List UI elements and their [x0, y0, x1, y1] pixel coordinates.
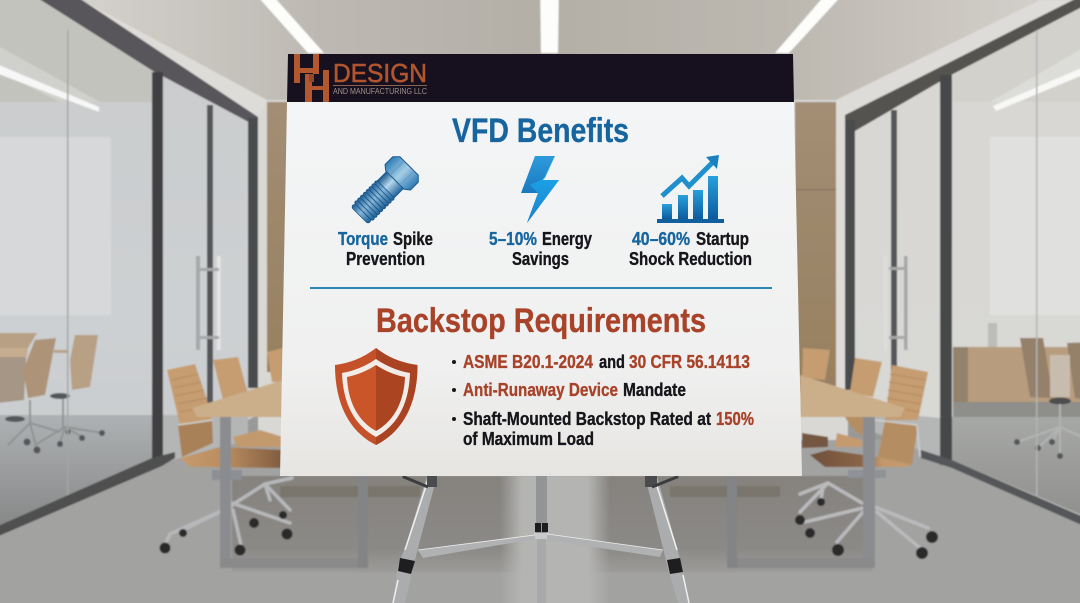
reflected ceiling [0, 0, 153, 102]
icon: lightning [521, 156, 559, 223]
frame: top beam [25, 0, 258, 127]
table top [192, 380, 283, 417]
bullet 3 [452, 409, 754, 449]
bullet 2: Anti-Runaway Device [463, 380, 618, 400]
reflected chairs [1014, 338, 1080, 459]
braces [418, 535, 535, 558]
label: Torque Spike Prevention: Torque [338, 229, 388, 249]
logo mark: HH monogram [294, 54, 329, 102]
reflected sideboard [953, 347, 1080, 403]
left leg [393, 476, 437, 603]
ceiling [0, 0, 1080, 110]
left table and chairs [160, 348, 368, 568]
heading: Backstop Requirements: Backstop Requirements [376, 302, 706, 340]
label: 5-10% Energy Savings [489, 229, 592, 269]
logo text: DESIGN [333, 58, 427, 88]
bullet 1: 30 CFR 56.14113 [629, 352, 750, 372]
label: 5-10% Energy Savings: 5–10% [489, 229, 537, 249]
chair ribs [172, 374, 210, 412]
left glass wall [0, 0, 267, 544]
table frame [863, 416, 875, 568]
hooks [404, 470, 428, 487]
heading: VFD Benefits: VFD Benefits [452, 112, 629, 150]
right glass wall [836, 0, 1080, 533]
wood wall panels [267, 102, 836, 392]
icon: bolt [347, 153, 422, 228]
bullet 3: Shaft-Mounted Backstop Rated at [463, 409, 711, 429]
right leg [645, 476, 688, 603]
frame: posts [940, 75, 952, 465]
front chair [885, 365, 928, 420]
rear chairs [802, 348, 830, 380]
board body [280, 102, 802, 476]
label: Torque Spike Prevention: Spike [393, 229, 433, 249]
reflected whiteboard [0, 137, 111, 315]
chair bases [800, 483, 928, 548]
label: Torque Spike Prevention [338, 229, 433, 269]
table top [800, 375, 905, 417]
chair ribs [886, 374, 926, 412]
bolt neck [376, 169, 406, 199]
easel [393, 470, 689, 603]
label: Torque Spike Prevention: Prevention [346, 249, 425, 269]
frame: floor rail [0, 452, 175, 544]
door handles [884, 256, 908, 350]
reflected floor [952, 417, 1080, 523]
frame: top beam [845, 0, 1080, 137]
label: 40-60% Startup Shock Reduction: Shock Reduction [629, 249, 752, 269]
ceiling lights [243, 0, 856, 53]
logo [294, 54, 427, 102]
panel: poster board [280, 54, 802, 476]
label: 40-60% Startup Shock Reduction: Startup [696, 229, 749, 249]
table frame [220, 416, 231, 568]
bullet 2: Mandate [623, 380, 686, 400]
reflected light fixture [993, 60, 1080, 111]
front chair [167, 364, 212, 425]
reflected floor [0, 415, 152, 541]
bolt thread [350, 180, 395, 225]
center pole [536, 476, 547, 533]
label: 5-10% Energy Savings: Savings [512, 249, 569, 269]
bullet 1 [452, 352, 750, 372]
chair base [165, 478, 292, 545]
label: 40-60% Startup Shock Reduction: 40–60% [632, 229, 690, 249]
list: backstop requirements [452, 352, 754, 449]
icon: growth chart [657, 155, 724, 223]
bullet 1: ASME B20.1-2024 [463, 352, 593, 372]
header band [287, 54, 794, 102]
door handles [196, 256, 220, 350]
reflected light fixture [0, 57, 99, 112]
label: 5-10% Energy Savings: Energy [542, 229, 592, 249]
bullet 3: 150% [716, 409, 754, 429]
reflected vase [988, 323, 997, 347]
bullet 1: and [599, 352, 625, 372]
icon: shield [335, 348, 418, 445]
right table and chairs [727, 348, 938, 568]
rear chairs [213, 357, 250, 400]
frame: posts [152, 72, 163, 464]
label: 40-60% Startup Shock Reduction [629, 229, 752, 269]
frame: floor rail [921, 450, 1080, 533]
logo: AND MANUFACTURING LLC [333, 87, 427, 96]
reflected furniture [0, 333, 105, 454]
bullet 3: of Maximum Load [463, 429, 594, 449]
bolt head [382, 153, 422, 193]
